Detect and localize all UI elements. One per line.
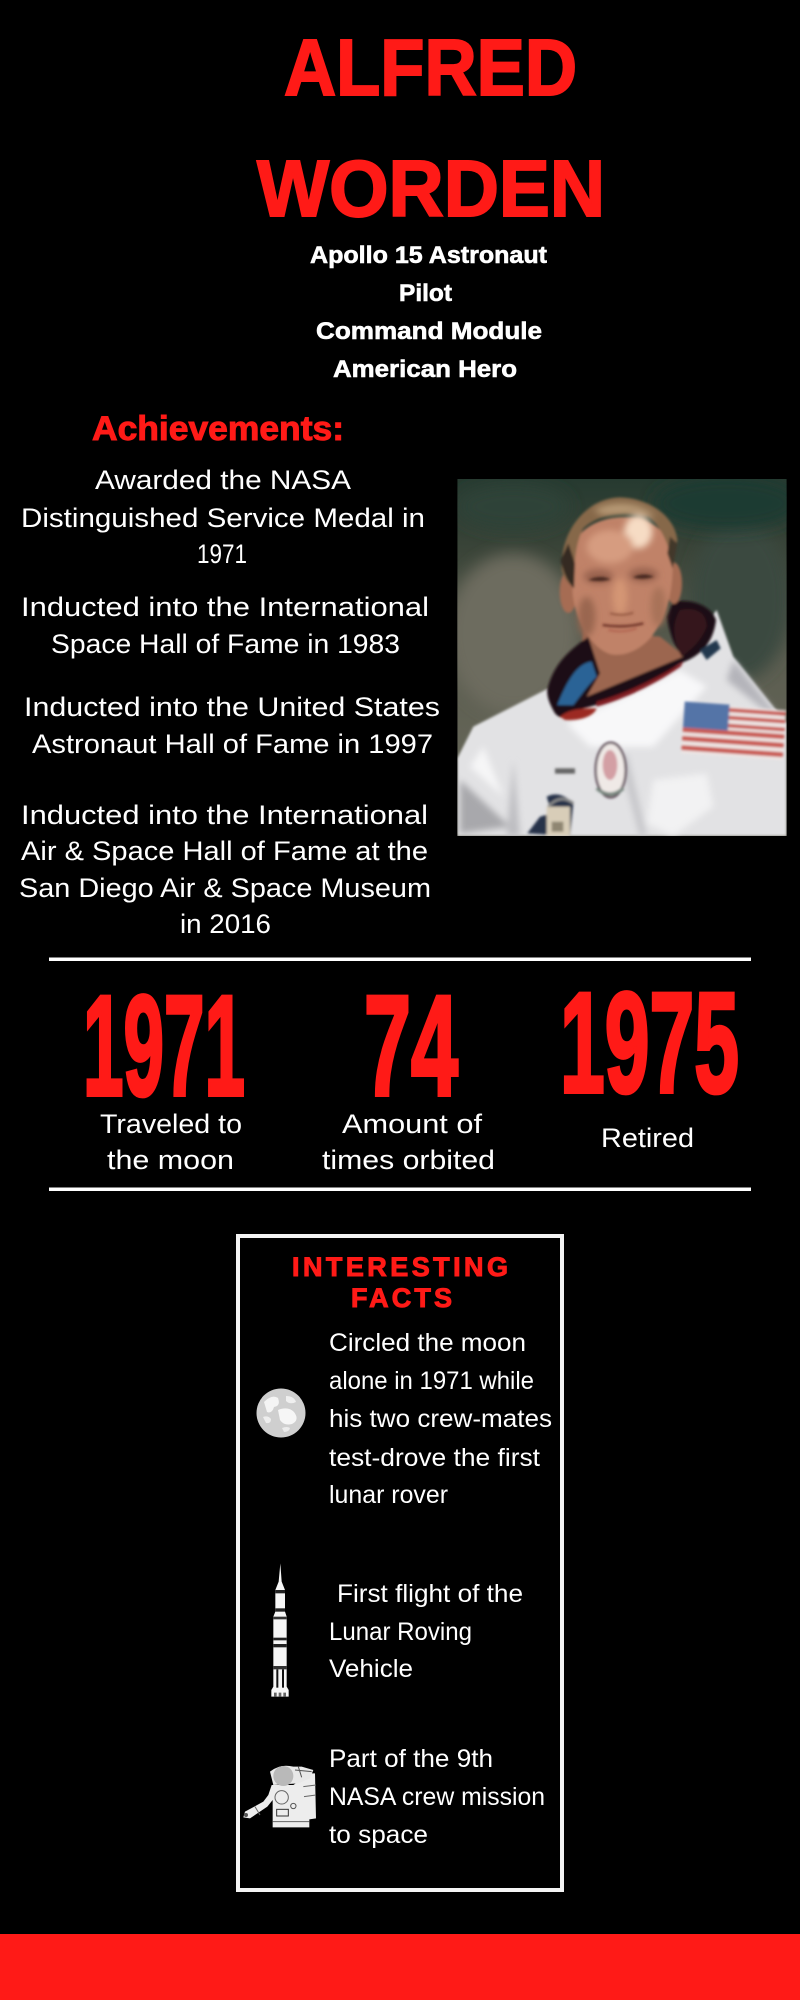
title: ALFRED xyxy=(284,23,577,112)
achievement: Air and Space Hall of Fame: San Diego Air & Space Museum xyxy=(19,873,431,903)
fact: circled the moon: test-drove the first xyxy=(329,1444,540,1472)
subtitle roles: Pilot xyxy=(399,280,452,307)
subtitle roles xyxy=(310,242,547,383)
fact: ninth NASA crew mission: NASA crew mission xyxy=(329,1783,545,1811)
facts heading xyxy=(292,1252,508,1313)
achievement: NASA medal: Distinguished Service Medal in xyxy=(21,503,425,533)
fact: circled the moon xyxy=(329,1329,552,1509)
portrait photo of astronaut xyxy=(447,477,800,836)
achievements list xyxy=(19,465,440,939)
stat: 1971 xyxy=(83,967,245,1175)
fact: lunar roving vehicle: Lunar Roving xyxy=(329,1618,472,1646)
neck xyxy=(578,630,685,702)
patch xyxy=(596,743,626,797)
fact: circled the moon: alone in 1971 while xyxy=(329,1367,534,1395)
achievement: International Space Hall of Fame: Inducted into the International xyxy=(21,592,429,622)
collar ring xyxy=(547,601,716,717)
fact: lunar roving vehicle xyxy=(329,1580,523,1683)
subtitle roles: Command Module xyxy=(316,318,542,345)
fact: circled the moon: Circled the moon xyxy=(329,1329,526,1357)
facts heading: FACTS xyxy=(351,1283,452,1313)
stat: 74: 74 xyxy=(364,967,458,1126)
name tag xyxy=(555,768,575,774)
icon: astronaut xyxy=(243,1766,316,1827)
stat: 74: Amount of xyxy=(342,1109,483,1139)
icon: rocket xyxy=(271,1563,289,1697)
fact: ninth NASA crew mission: to space xyxy=(329,1821,428,1849)
panel: interesting facts xyxy=(238,1236,562,1890)
achievement: Air and Space Hall of Fame: Air & Space Hall of Fame at the xyxy=(21,836,428,866)
achievements heading: Achievements: xyxy=(92,410,344,448)
fact: circled the moon: his two crew-mates xyxy=(329,1405,552,1433)
fact: ninth NASA crew mission: Part of the 9th xyxy=(329,1745,493,1773)
subtitle roles: Apollo 15 Astronaut xyxy=(310,242,547,269)
suit xyxy=(457,610,787,836)
ears xyxy=(560,570,577,613)
mouth xyxy=(603,623,643,626)
top divider xyxy=(49,958,751,961)
facts heading: INTERESTING xyxy=(292,1252,508,1282)
fact: lunar roving vehicle: Vehicle xyxy=(329,1655,413,1683)
achievement: US Astronaut Hall of Fame: Astronaut Hall of Fame in 1997 xyxy=(32,729,433,759)
stat: 1971: 1971 xyxy=(83,967,245,1126)
chest connector xyxy=(527,794,573,836)
achievement: NASA medal: Awarded the NASA xyxy=(95,465,351,495)
fact: circled the moon: lunar rover xyxy=(329,1481,448,1509)
achievement: NASA medal xyxy=(21,465,425,569)
achievement: US Astronaut Hall of Fame xyxy=(24,692,440,759)
hair xyxy=(562,497,677,587)
bottom divider xyxy=(49,1188,751,1191)
achievement: International Space Hall of Fame: Space Hall of Fame in 1983 xyxy=(51,629,400,659)
face xyxy=(572,517,673,655)
achievement: Air and Space Hall of Fame: Inducted into the International xyxy=(21,800,428,830)
stat: 74 xyxy=(322,967,495,1175)
achievement: Air and Space Hall of Fame xyxy=(19,800,431,939)
achievement: International Space Hall of Fame xyxy=(21,592,429,659)
title xyxy=(257,23,605,233)
achievement: US Astronaut Hall of Fame: Inducted into the United States xyxy=(24,692,440,722)
footer bar xyxy=(0,1934,800,2000)
subtitle roles: American Hero xyxy=(333,356,517,383)
fact: ninth NASA crew mission xyxy=(329,1745,545,1849)
achievement: NASA medal: 1971 xyxy=(197,539,247,569)
icon: moon xyxy=(256,1388,306,1438)
stat: 1975 xyxy=(560,964,739,1153)
achievement: Air and Space Hall of Fame: in 2016 xyxy=(180,909,271,939)
stats row xyxy=(83,964,739,1175)
fact: lunar roving vehicle: First flight of the xyxy=(337,1580,523,1608)
title: WORDEN xyxy=(257,144,605,233)
stat: 1971: the moon xyxy=(107,1145,234,1175)
eyes xyxy=(588,577,611,581)
stat: 74: times orbited xyxy=(322,1145,495,1175)
stat: 1971: Traveled to xyxy=(100,1109,242,1139)
US flag xyxy=(681,702,786,760)
stat: 1975: Retired xyxy=(601,1123,694,1153)
